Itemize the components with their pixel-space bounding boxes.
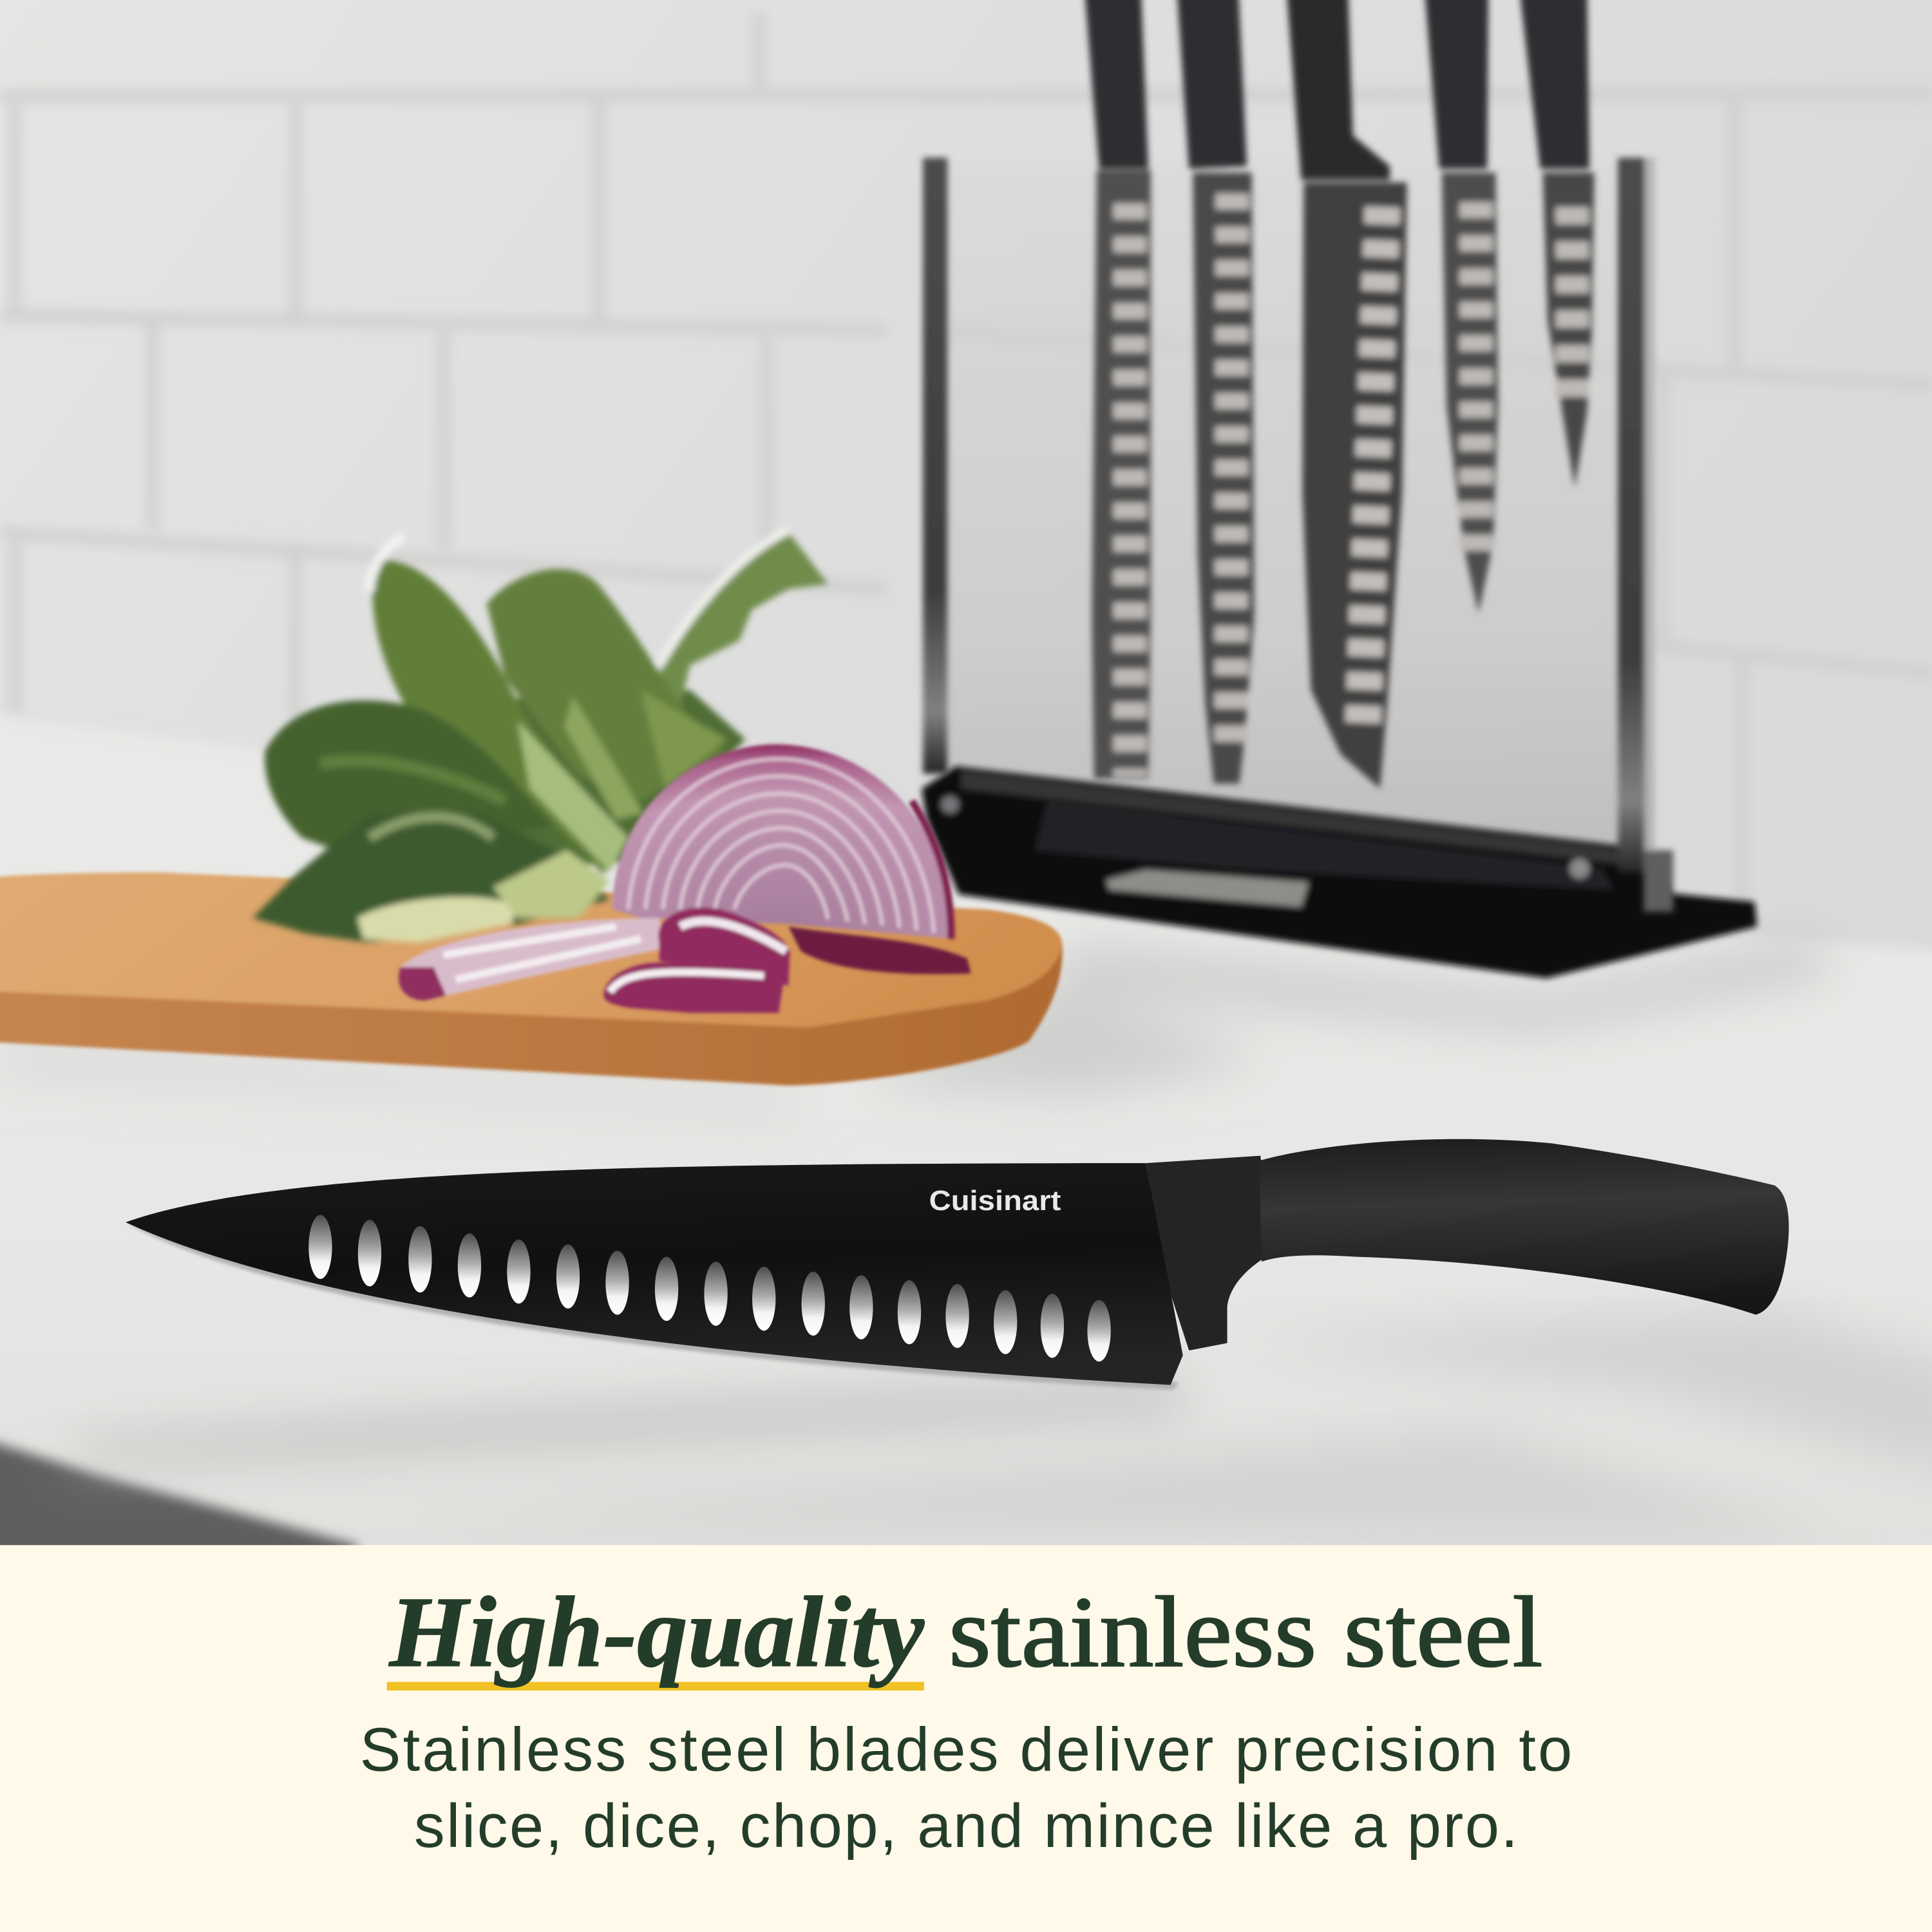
description text: Stainless steel blades deliver precision to [360,1715,1572,1784]
description text: slice, dice, chop, and mince like a pro. [414,1792,1518,1861]
bok choy base cluster [252,813,610,943]
knife 5 [1519,0,1595,488]
onion slice, upright ring [658,907,790,986]
bok choy top-right leaf [653,533,828,727]
bok choy left leaf [265,700,554,862]
acrylic panel [946,160,1622,850]
dark onion slice [788,927,971,974]
onion outer skin [912,801,951,939]
board top face [0,873,1062,1028]
blade edge bevel [126,1222,1179,1390]
blade hollow-edge holes [308,1215,1111,1361]
heading: stainless steel [949,1576,1542,1688]
base [922,766,1757,978]
onion slice, long [399,918,663,1001]
knife 4 [1425,0,1499,614]
blade [126,1163,1183,1385]
handle [1259,1139,1789,1314]
panel background [0,1545,1932,1932]
left post [923,158,947,774]
knife 3 [1286,0,1407,788]
background: counter surface [0,711,1932,1602]
onion rings [629,759,934,933]
hero chef knife [126,1139,1789,1390]
brand logo on blade: Cuisinart [929,1185,1061,1217]
highlight underline [387,1682,924,1690]
vegetables: bok choy [252,530,828,943]
bok choy upright leaf [373,560,622,875]
bolster [1146,1156,1271,1350]
onion slice, lower ring [604,963,784,1013]
cutting board [0,873,1063,1086]
vegetables: red onion [399,744,971,1013]
bok choy stems [518,721,629,873]
knife block: acrylic stand with knives [922,0,1757,978]
caption panel [0,1545,1932,1932]
counter shadows [0,936,1932,1540]
right post [1618,158,1673,912]
bok choy back leaf [487,569,727,801]
knife 2 [1177,0,1255,784]
knife 1 [1084,0,1151,779]
description text [360,1715,1572,1861]
bok choy mass [370,690,746,875]
heading [388,1576,1542,1688]
board front face [0,943,1063,1086]
heading: High-quality [388,1576,925,1688]
onion half [612,744,954,939]
counter front edge shadow [0,1437,357,1589]
background: tiled wall [0,0,1932,1109]
